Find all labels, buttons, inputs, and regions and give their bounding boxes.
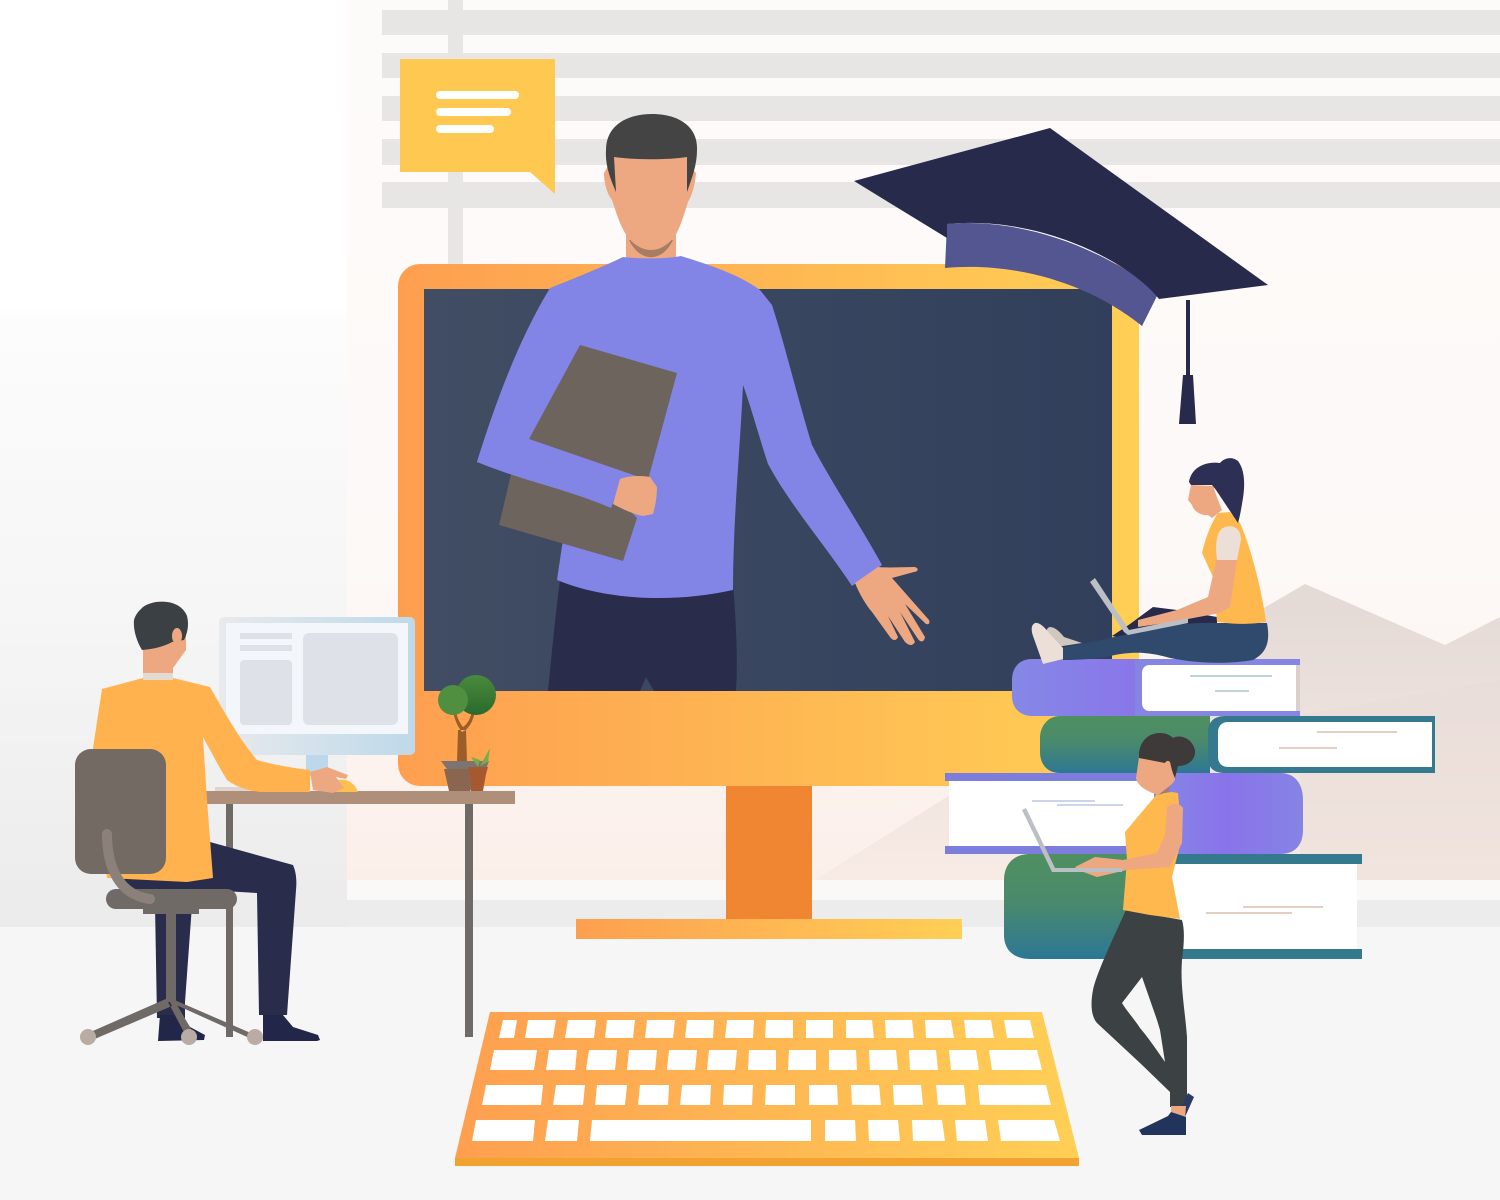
teacher sweater	[477, 256, 882, 598]
neck shadow	[629, 240, 673, 257]
teacher trousers	[548, 580, 737, 691]
neck and face	[143, 628, 186, 673]
hand	[310, 767, 348, 793]
monitor	[398, 264, 1139, 939]
window blinds	[382, 0, 1500, 270]
book 4 bottom green	[1004, 854, 1362, 959]
arm	[1138, 557, 1237, 627]
head	[1188, 485, 1222, 518]
back foot	[1047, 627, 1082, 647]
mouse	[334, 780, 358, 792]
keyboard	[455, 1012, 1079, 1166]
teacher folder	[499, 345, 677, 561]
laptop	[1022, 808, 1122, 872]
sleeve	[1216, 526, 1241, 560]
arm	[1075, 804, 1183, 877]
teacher hair	[606, 114, 697, 192]
ear	[172, 628, 182, 644]
shirt	[93, 678, 310, 882]
graduation cap	[854, 128, 1268, 424]
neck shadow	[1158, 786, 1171, 795]
book 2 green	[1040, 716, 1435, 773]
laptop	[1090, 578, 1188, 635]
monitor screen	[424, 289, 1112, 691]
desk top	[203, 787, 515, 804]
shoes	[158, 1015, 320, 1041]
speech bubble	[400, 59, 555, 194]
teacher	[477, 114, 929, 691]
book 3 purple	[945, 773, 1303, 854]
laptop base in front of hand	[1076, 868, 1122, 872]
legs	[1092, 910, 1187, 1107]
book stack	[945, 659, 1435, 959]
woman sitting on books	[1032, 458, 1268, 664]
chair	[75, 749, 263, 1045]
legs	[1063, 623, 1268, 663]
plant	[438, 675, 496, 791]
teacher open hand	[855, 567, 929, 645]
background wall	[0, 0, 1500, 930]
collar	[143, 672, 173, 680]
foot	[1139, 1112, 1186, 1135]
front foot	[1032, 623, 1063, 664]
far lower leg	[155, 905, 192, 1018]
monitor frame	[398, 264, 1139, 786]
woman standing	[1022, 733, 1195, 1135]
book 1 top purple	[1012, 659, 1300, 716]
torso	[1123, 792, 1182, 919]
monitor stand	[576, 786, 962, 939]
near leg	[122, 842, 296, 1015]
teacher face	[604, 150, 696, 250]
head	[1136, 757, 1175, 795]
mountains	[815, 584, 1500, 880]
far leg	[1112, 607, 1217, 640]
hair	[1139, 733, 1195, 778]
teacher holding hand	[613, 476, 657, 516]
keys	[472, 1020, 1060, 1141]
torso	[1202, 512, 1266, 624]
desk legs	[226, 804, 473, 1037]
back foot and ankle	[1178, 1093, 1194, 1117]
hair	[1189, 458, 1244, 523]
hair	[134, 602, 188, 650]
computer	[219, 617, 415, 776]
desk and seated man	[75, 602, 515, 1045]
floor	[0, 927, 1500, 1200]
teacher sleeve over folder	[477, 345, 622, 508]
teacher neck	[626, 225, 676, 262]
